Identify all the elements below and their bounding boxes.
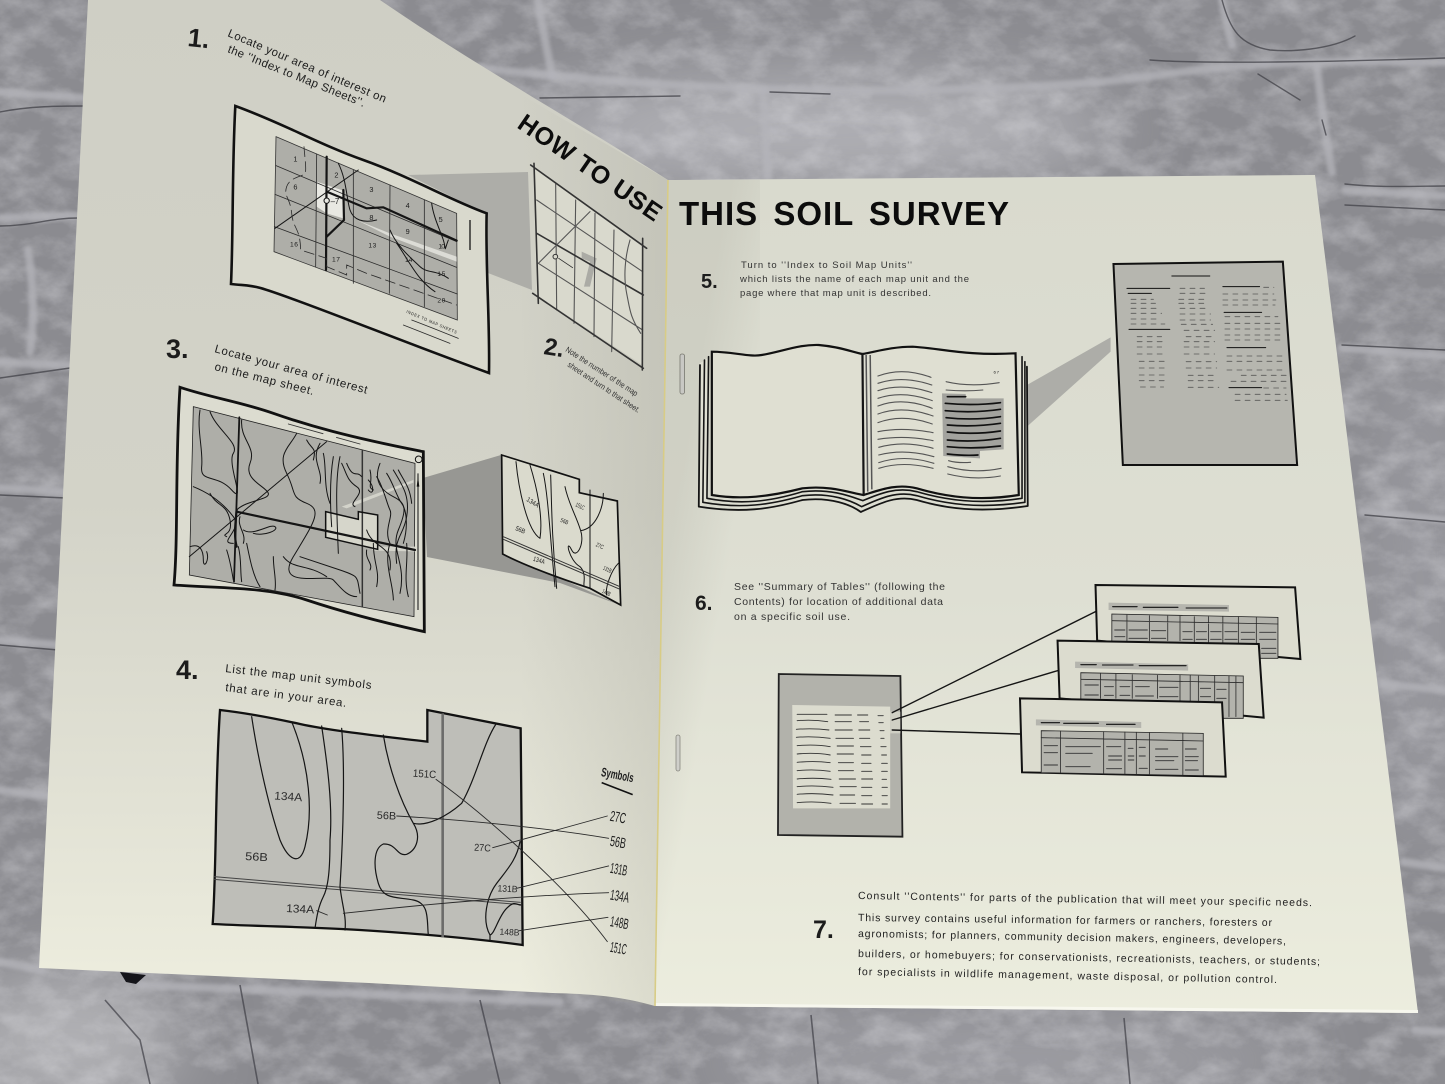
left page <box>39 0 668 1006</box>
instruction 2 line 2: sheet and turn to that sheet. <box>566 360 642 415</box>
figure: cropped detail of map: 56B <box>514 525 527 536</box>
symbols list <box>600 765 635 959</box>
step 2 instruction <box>542 333 640 398</box>
symbols list: 151C <box>609 940 628 959</box>
instruction 4: that are in your area. <box>225 682 347 710</box>
staple: lower <box>676 735 680 771</box>
figure: index to map sheets <box>231 106 489 373</box>
index grid <box>274 137 457 320</box>
index grid: –7 <box>331 197 340 206</box>
instruction 5 <box>739 260 969 299</box>
staple: upper <box>680 354 684 394</box>
map labels: 134A <box>286 903 315 916</box>
leader lines <box>317 779 609 942</box>
figure: summary of tables with three table cards <box>778 585 1300 837</box>
index grid: 5 <box>439 215 443 224</box>
number 4: 4. <box>176 655 199 685</box>
figure: cropped detail of map: 131B <box>602 566 612 575</box>
figure: cropped detail of map: 148B <box>601 589 611 598</box>
contents page <box>778 674 902 837</box>
map labels: 56B <box>245 851 268 864</box>
step 1 heading <box>186 22 388 106</box>
instruction 4: List the map unit symbols <box>225 663 372 692</box>
instruction 5: Turn to ''Index to Soil Map Units'' <box>741 260 912 271</box>
index grid: 15 <box>437 271 446 278</box>
symbols list: Symbols <box>600 765 635 785</box>
instruction 1 line 2: the ''Index to Map Sheets''. <box>226 44 367 110</box>
index grid: 20 <box>437 298 446 305</box>
title: part on right page: THIS SOIL SURVEY <box>679 195 1009 232</box>
instruction 5: which lists the name of each map unit and the <box>739 274 969 285</box>
symbols list: 148B <box>609 914 630 933</box>
north arrow <box>415 456 422 610</box>
contours <box>189 410 415 607</box>
instruction 4 <box>225 663 372 710</box>
beam from index to map sheet <box>408 172 532 290</box>
contours <box>252 717 521 941</box>
figure: open book with beam and index page <box>699 262 1297 512</box>
book highlighted list <box>942 393 1004 458</box>
roads <box>214 713 521 937</box>
index grid: 8 <box>369 213 373 222</box>
index grid: 14 <box>405 257 413 264</box>
number 7: 7. <box>813 916 834 944</box>
symbols list: 134A <box>609 888 631 907</box>
symbols list: 56B <box>609 834 627 852</box>
figure: map sheet enlargement <box>531 163 647 370</box>
instruction 7: This survey contains useful information for farmers or ranchers, foresters or <box>858 912 1273 929</box>
instruction 6: on a specific soil use. <box>734 611 850 623</box>
instruction 1: Locate your area of interest on <box>226 28 388 106</box>
map labels: 134A <box>274 790 303 804</box>
title <box>513 109 1009 232</box>
index grid: 16 <box>290 242 298 249</box>
map labels: 56B <box>377 810 396 823</box>
number 3: 3. <box>166 334 189 364</box>
figure: cropped detail of map <box>502 455 621 605</box>
leader lines <box>892 612 1096 734</box>
beam from map sheet to detail <box>423 455 620 605</box>
figure: cropped detail of map: 56B <box>559 518 569 527</box>
book pages stack <box>699 345 1028 512</box>
symbols list: 27C <box>609 809 627 827</box>
index grid: 3 <box>369 185 373 194</box>
figure: cropped detail of map: 134A <box>525 496 540 510</box>
index page <box>1113 262 1297 465</box>
instruction 6 <box>734 581 945 623</box>
index grid: 1 <box>293 154 297 163</box>
index caption: INDEX TO MAP SHEETS <box>406 309 458 335</box>
right page <box>655 175 1418 1013</box>
right page bottom edge <box>655 1003 1418 1013</box>
beam <box>1027 337 1111 427</box>
book text lines <box>878 370 1001 478</box>
number 1: 1. <box>186 22 211 54</box>
north arrow <box>469 220 471 250</box>
map labels: 151C <box>412 768 437 781</box>
index grid: 2 <box>334 170 338 179</box>
book text lines: 67 <box>993 370 1000 374</box>
map labels: 131B <box>497 883 518 894</box>
instruction 5: page where that map unit is described. <box>740 288 931 299</box>
index grid: 10 <box>438 243 445 250</box>
instruction 7: agronomists; for planners, community decision makers, engineers, developers, <box>858 928 1286 947</box>
number 6: 6. <box>695 592 713 615</box>
number 5: 5. <box>701 271 718 293</box>
spine <box>655 180 668 1006</box>
symbols list: 131B <box>609 861 628 880</box>
map labels: 27C <box>474 843 491 855</box>
index grid: 9 <box>406 227 410 236</box>
fold shading <box>520 94 760 1006</box>
map labels <box>245 768 520 938</box>
figure: map sheet <box>174 387 424 632</box>
number 2: 2. <box>542 333 566 363</box>
map labels: 148B <box>499 927 520 938</box>
table card 1 <box>1096 585 1300 659</box>
index grid: 6 <box>293 183 297 192</box>
index grid: 13 <box>368 243 377 250</box>
instruction 7: Consult ''Contents'' for parts of the publication that will meet your specific needs. <box>858 890 1312 909</box>
figure: cropped detail of map: 151C <box>574 502 586 512</box>
instruction 3: on the map sheet. <box>213 361 315 398</box>
index grid: 17 <box>332 257 340 264</box>
instruction 6: Contents) for location of additional data <box>734 596 943 608</box>
figure: cropped detail of map: 134A <box>532 556 546 566</box>
table card 3 <box>1020 698 1226 777</box>
figure: cropped detail of map: 27C <box>594 542 605 551</box>
instruction 7 <box>858 890 1320 986</box>
figure: map unit symbols <box>213 710 635 959</box>
instruction 6: See ''Summary of Tables'' (following the <box>734 581 945 593</box>
instruction 7: builders, or homebuyers; for conservationists, recreationists, teachers, or students; <box>858 948 1320 968</box>
title: part on left page: HOW TO USE <box>513 109 667 227</box>
instruction 7: for specialists in wildlife management, waste disposal, or pollution control. <box>858 966 1277 986</box>
instruction 3: Locate your area of interest <box>213 343 370 397</box>
table card 2 <box>1058 641 1264 718</box>
index grid: 4 <box>406 201 410 210</box>
instruction 2: Note the number of the map <box>564 345 640 398</box>
